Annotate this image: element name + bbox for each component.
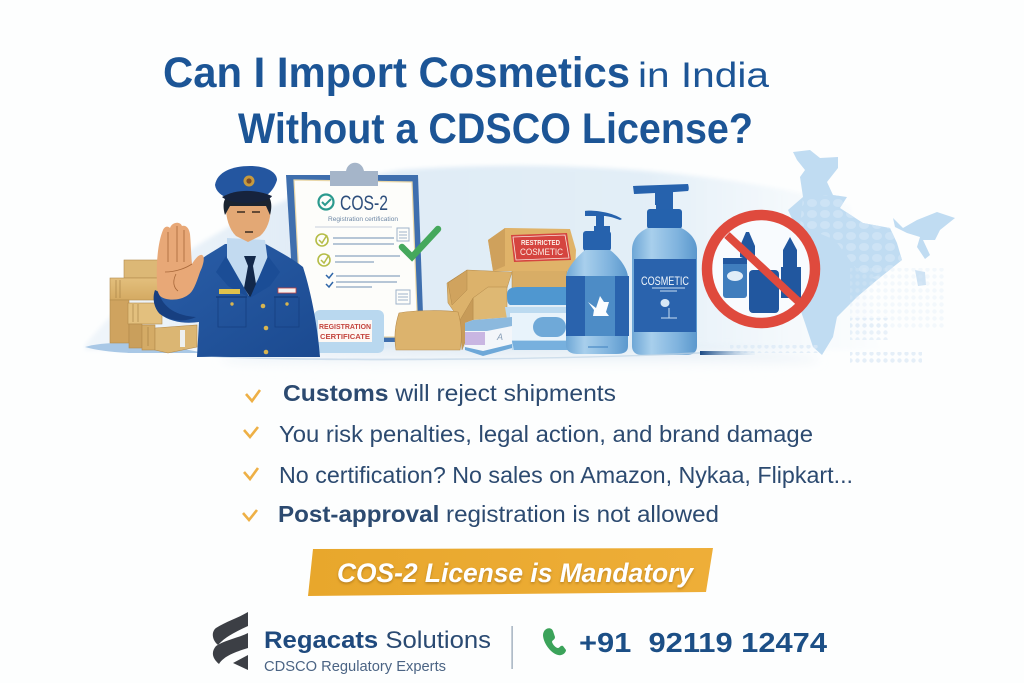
company name — [264, 627, 491, 675]
footer divider — [512, 626, 513, 669]
title: Without a CDSCO License? — [238, 105, 753, 153]
bullet 4: Post-approval registration is not allowed — [278, 501, 719, 527]
raised hand — [157, 223, 204, 300]
lapels — [216, 256, 280, 298]
prohibition sign with cosmetics — [707, 215, 815, 323]
shirt and tie — [227, 238, 268, 297]
registration certificate card: CERTIFICATE — [320, 332, 370, 341]
company name: CDSCO Regulatory Experts — [264, 658, 446, 675]
India map — [730, 150, 955, 364]
jar — [505, 287, 568, 350]
blue floor shadow — [85, 343, 205, 353]
bullet 2: You risk penalties, legal action, and brand damage — [279, 421, 813, 447]
cosmetic box label — [488, 228, 576, 271]
cosmetic box label: COSMETIC — [520, 247, 563, 258]
title: in India — [638, 56, 770, 95]
stacked cartons — [447, 270, 567, 350]
parcel and boxes centre — [395, 228, 576, 350]
small product box: A — [496, 332, 503, 342]
title — [163, 49, 770, 153]
customs officer — [154, 166, 320, 357]
uniform — [154, 243, 320, 357]
registration certificate card — [314, 310, 384, 353]
registration subtitle: Registration certification — [328, 217, 398, 223]
title: Can I Import Cosmetics — [163, 49, 630, 97]
pump bottle large — [632, 184, 697, 355]
registration certificate card: REGISTRATION — [319, 322, 371, 331]
clip — [330, 163, 378, 186]
icon: phone — [543, 628, 566, 655]
pockets and badges — [216, 288, 299, 354]
COS-2 check icon — [318, 194, 334, 210]
floor shadow — [197, 351, 755, 360]
illustration — [85, 150, 955, 373]
mandatory banner: COS-2 License is Mandatory — [337, 558, 695, 588]
mandatory banner — [308, 548, 713, 596]
COS-2 heading: COS-2 — [340, 192, 388, 215]
cardboard boxes left — [85, 260, 205, 353]
small product box — [465, 317, 512, 356]
bullet 3: No certification? No sales on Amazon, Nykaa, Flipkart... — [279, 462, 853, 488]
footer logo mark — [213, 612, 248, 670]
checklist of consequences — [243, 380, 853, 527]
green check mark — [402, 229, 438, 257]
background swoosh — [85, 166, 880, 373]
soft parcel — [395, 311, 461, 350]
sleeve cuff — [154, 290, 196, 320]
phone number: +91 92119 12474 — [579, 627, 827, 658]
cosmetic box label: RESTRICTED — [521, 238, 561, 247]
bullet 1: Customs will reject shipments — [283, 380, 616, 406]
clipboard — [286, 163, 424, 342]
pump bottle large: COSMETIC — [641, 274, 689, 288]
cap — [215, 166, 277, 203]
pump bottle small — [566, 211, 629, 354]
checklist — [315, 227, 410, 304]
head — [226, 200, 271, 242]
company name: Regacats Solutions — [264, 627, 491, 654]
